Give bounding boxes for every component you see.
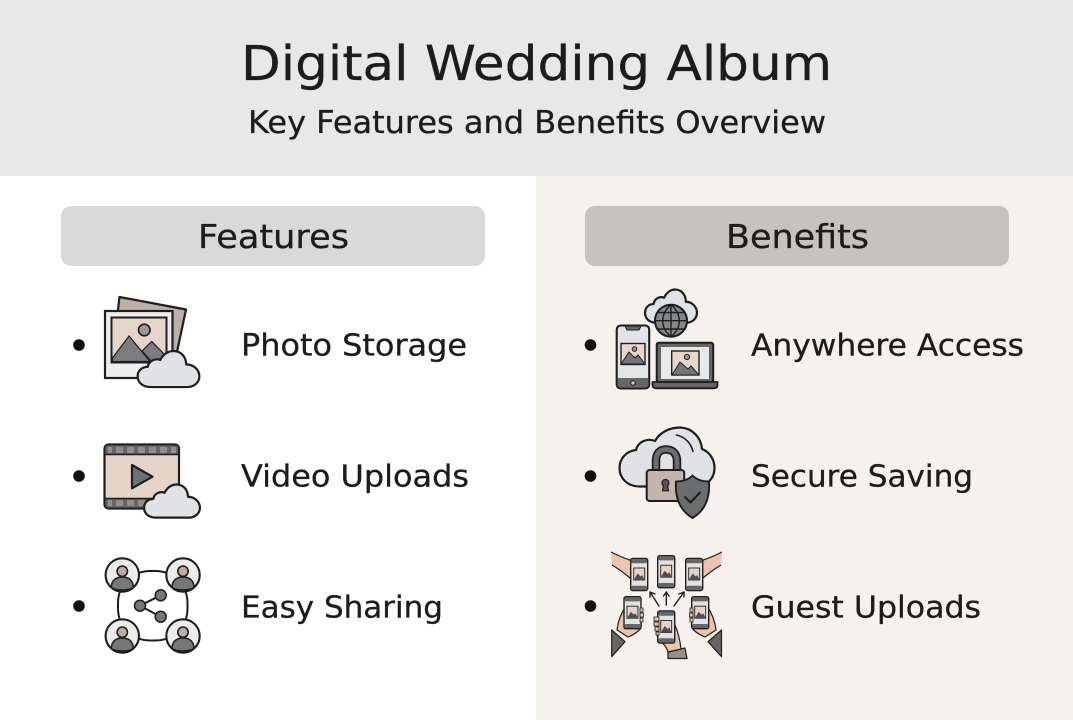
heading: benefits: Benefits <box>726 217 869 256</box>
benefit: guest uploads <box>585 552 981 658</box>
icon: photos and cloud <box>105 297 199 387</box>
icon: devices and cloud globe <box>617 290 718 388</box>
header band <box>0 0 1073 176</box>
bullet <box>585 470 596 482</box>
feature: easy sharing <box>73 558 443 653</box>
label: Guest Uploads <box>751 590 981 626</box>
heading: benefits <box>585 206 1009 266</box>
icon: film and cloud <box>104 444 200 518</box>
label: Video Uploads <box>241 460 469 494</box>
benefit: secure saving <box>585 428 973 518</box>
bullet <box>585 339 596 351</box>
bullet <box>73 339 85 351</box>
label: Secure Saving <box>751 460 973 494</box>
label: Photo Storage <box>241 328 467 364</box>
feature: photo storage <box>73 297 467 387</box>
bullet <box>73 600 85 612</box>
heading: features <box>61 206 485 266</box>
label: Anywhere Access <box>751 328 1024 364</box>
bullet <box>585 600 596 612</box>
bullet <box>73 470 85 482</box>
panel: features <box>61 206 485 653</box>
panel: benefits <box>585 206 1024 658</box>
benefit: anywhere access <box>585 290 1024 388</box>
title: Digital Wedding Album <box>241 36 832 92</box>
feature: video uploads <box>73 444 469 518</box>
icon: sharing network <box>106 558 200 653</box>
icon: cloud lock and shield <box>620 428 714 518</box>
icon: guest phones in hands <box>611 552 722 658</box>
heading: features: Features <box>198 217 349 256</box>
label: Easy Sharing <box>241 590 443 626</box>
subtitle: Key Features and Benefits Overview <box>248 105 826 141</box>
